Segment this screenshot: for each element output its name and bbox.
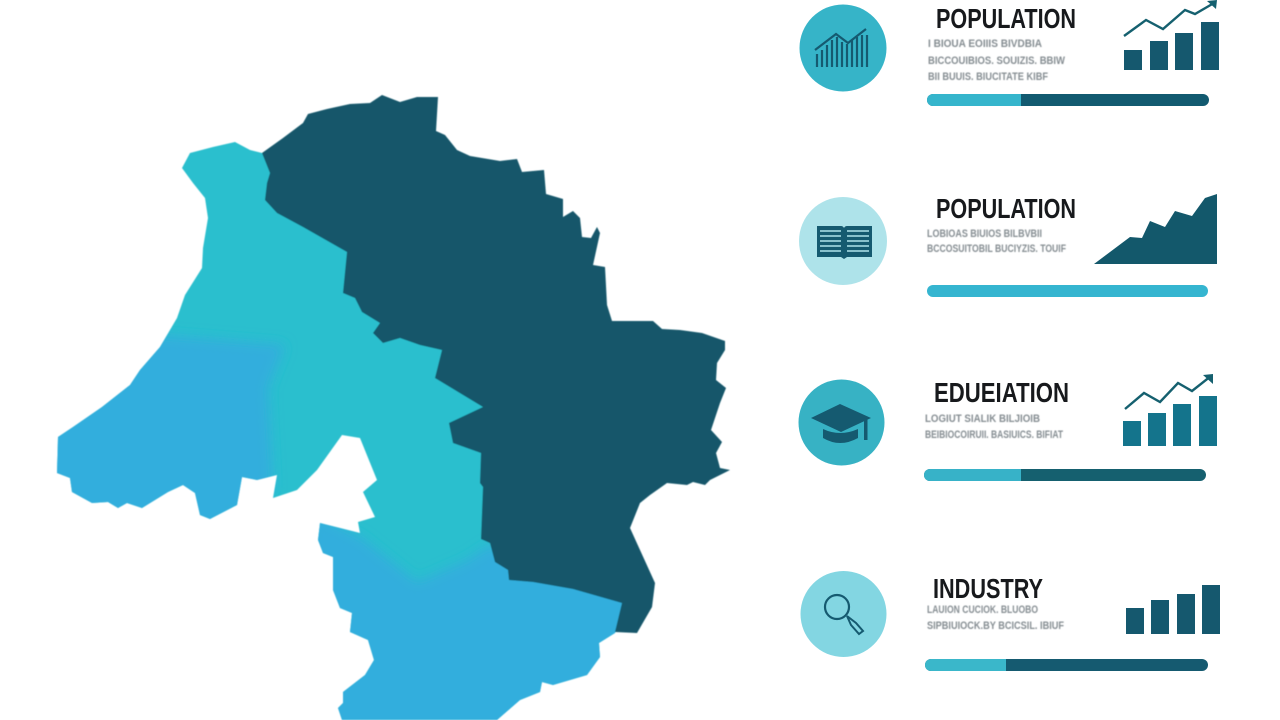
heading: INDUSTRY [933, 573, 1043, 604]
body text: LAUION CUCIOK. BLUOBO [927, 604, 1038, 616]
body text: BCCOSUITOBIL BUCIYZIS. TOUIF [927, 243, 1066, 255]
progress bar [927, 94, 1209, 106]
chart: bars [1126, 585, 1220, 634]
panel: education row [798, 374, 1217, 481]
body text [927, 228, 1066, 255]
panel: industry row [800, 571, 1220, 671]
progress bar [927, 285, 1208, 297]
progress bar [924, 469, 1206, 481]
panel: population row 1 [800, 0, 1219, 106]
heading: EDUEIATION [934, 377, 1069, 408]
body text: LOBIOAS BIUIOS BILBVBII [927, 228, 1042, 240]
body text [928, 38, 1066, 83]
map region: teal centre and western and southern blue zones [56, 141, 623, 720]
icon: magnifier in circle [800, 571, 886, 657]
body text: LOGIUT SIALIK BILJIOIB [925, 413, 1040, 425]
body text: I BIOUA EOIIIS BIVDBIA [928, 38, 1042, 50]
map region: dark eastern zone [262, 95, 730, 633]
icon: graduation cap in circle [798, 380, 884, 466]
icon: open book in circle [799, 197, 887, 285]
chart: rising bars with arrow [1124, 0, 1219, 70]
body text: BICCOUIBIOS. SOUIZIS. BBIW [928, 55, 1066, 67]
map [30, 95, 730, 720]
body text: SIPBIUIOCK.BY BCICSIL. IBIUF [927, 620, 1064, 632]
heading: POPULATION [936, 193, 1076, 224]
body text: BII BUUIS. BIUCITATE KIBF [928, 71, 1048, 83]
heading: POPULATION [936, 3, 1076, 34]
progress bar [925, 659, 1208, 671]
body text: BEIBIOCOIRUII. BASIUICS. BIFIAT [925, 429, 1063, 441]
chart: area [1094, 194, 1217, 264]
icon: line and bars in circle [800, 4, 886, 92]
chart: rising bars with arrow [1123, 374, 1217, 446]
body text [927, 604, 1064, 632]
panel: population row 2 [799, 193, 1217, 297]
body text [925, 413, 1063, 441]
